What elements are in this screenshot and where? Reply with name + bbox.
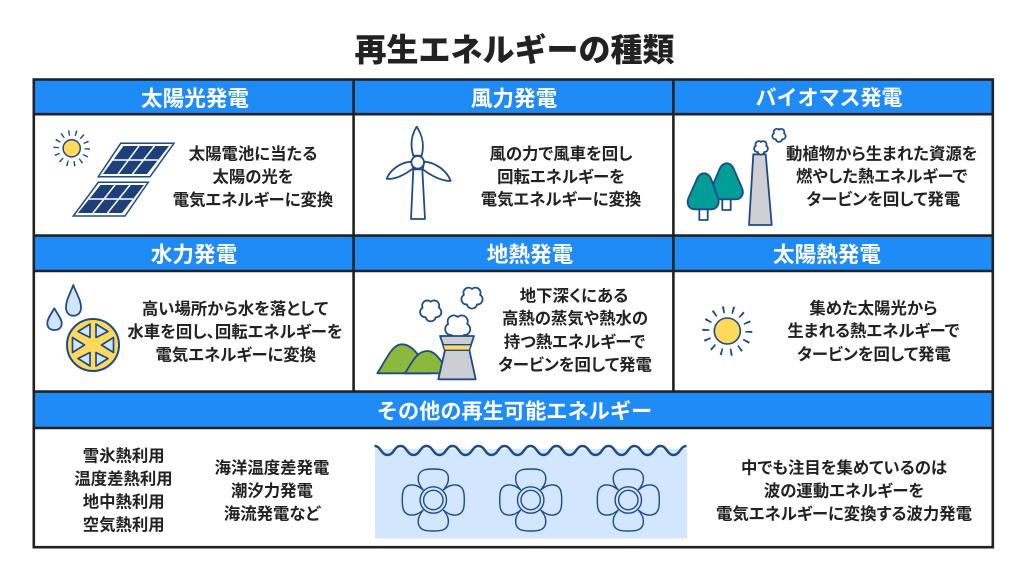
- text: solar thermal description: 集めた太陽光から: [809, 299, 937, 318]
- text: wave power description: 波の運動エネルギーを: [764, 482, 924, 500]
- icon: turbine 3: [597, 469, 659, 531]
- icon: large sun: [706, 310, 749, 352]
- heading: solar power: 太陽光発電: [141, 86, 249, 111]
- text: solar description: [173, 145, 333, 209]
- text: wind description: 電気エネルギーに変換: [481, 190, 641, 209]
- heading: solar thermal power: 太陽熱発電: [773, 242, 881, 267]
- text: hydro description: 電気エネルギーに変換: [156, 345, 316, 364]
- text: solar description: 太陽の光を: [212, 168, 294, 186]
- panel: table frame: [34, 80, 993, 547]
- text: other renewables list right: 海流発電など: [224, 505, 322, 523]
- text: geothermal description: 高熱の蒸気や熱水の: [502, 309, 648, 328]
- heading: other renewable energy: その他の再生可能エネルギー: [377, 399, 652, 423]
- title: 再生エネルギーの種類: [354, 32, 675, 68]
- text: hydro description: [127, 299, 343, 364]
- text: solar description: 太陽電池に当たる: [189, 145, 317, 163]
- text: biomass description: [786, 144, 977, 209]
- text: other renewables list right: 潮汐力発電: [231, 482, 313, 500]
- icon: geothermal plant with mountains: [377, 288, 483, 379]
- text: wave power description: 電気エネルギーに変換する波力発電: [716, 504, 972, 523]
- text: geothermal description: 地下深くにある: [520, 287, 628, 305]
- icon: solar panels: [73, 143, 174, 216]
- icon: turbine 2: [500, 469, 562, 531]
- text: hydro description: 高い場所から水を落として: [142, 299, 328, 318]
- text: wave power description: [716, 458, 972, 523]
- heading: biomass power: バイオマス発電: [756, 87, 902, 110]
- text: other renewables list right: [215, 458, 329, 523]
- text: wind description: [481, 144, 641, 209]
- text: biomass description: タービンを回して発電: [806, 190, 960, 209]
- text: solar thermal description: タービンを回して発電: [797, 345, 951, 364]
- icon: turbine 1: [402, 469, 464, 531]
- heading: hydro power: 水力発電: [151, 242, 238, 267]
- text: other renewables list right: 海洋温度差発電: [215, 458, 329, 477]
- heading: wind power: 風力発電: [471, 86, 558, 111]
- text: hydro description: 水車を回し、回転エネルギーを: [127, 322, 343, 341]
- text: other renewables list left: 雪氷熱利用: [83, 447, 165, 465]
- icon: wind turbine: [387, 127, 451, 219]
- text: other renewables list left: 温度差熱利用: [74, 469, 173, 488]
- text: solar thermal description: 生まれる熱エネルギーで: [787, 322, 960, 340]
- text: solar description: 電気エネルギーに変換: [173, 190, 333, 209]
- heading: geothermal power: 地熱発電: [487, 242, 574, 267]
- text: geothermal description: [498, 287, 652, 374]
- text: other renewables list left: 地中熱利用: [83, 493, 165, 511]
- illustration: wave power under the sea: [374, 446, 687, 538]
- text: wind description: 風の力で風車を回し: [489, 144, 633, 163]
- text: other renewables list left: [74, 447, 173, 534]
- text: geothermal description: タービンを回して発電: [498, 355, 652, 374]
- text: wave power description: 中でも注目を集めているのは: [741, 458, 947, 477]
- text: biomass description: 動植物から生まれた資源を: [786, 144, 977, 163]
- text: geothermal description: 持つ熱エネルギーで: [504, 333, 646, 351]
- icon: small sun: [56, 133, 87, 164]
- icon: trees and biomass chimney: [688, 129, 786, 225]
- text: wind description: 回転エネルギーを: [497, 168, 625, 186]
- text: solar thermal description: [787, 299, 960, 364]
- icon: water drops and water wheel: [47, 285, 119, 371]
- text: other renewables list left: 空気熱利用: [83, 515, 165, 534]
- text: biomass description: 燃やした熱エネルギーで: [796, 167, 968, 186]
